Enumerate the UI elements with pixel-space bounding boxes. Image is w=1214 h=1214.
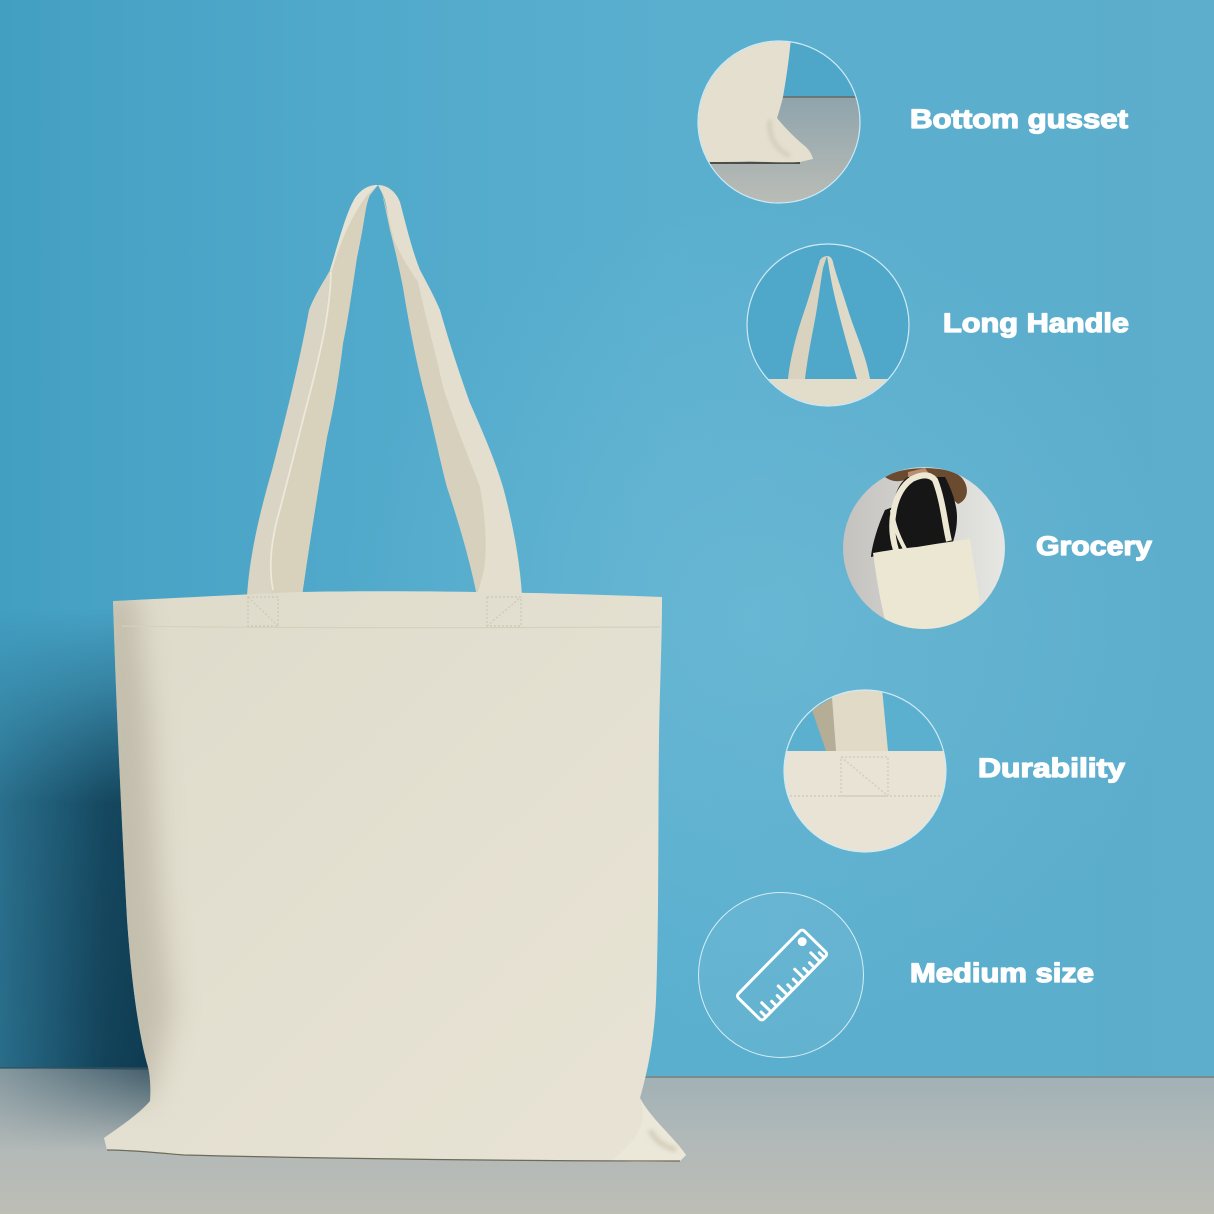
photo circle: person carrying bag xyxy=(842,466,1006,640)
label: Grocery xyxy=(1036,531,1152,561)
bag body xyxy=(104,591,686,1162)
label: Durability xyxy=(978,753,1125,783)
handle: left strap xyxy=(247,185,378,596)
label: Long Handle xyxy=(943,308,1129,338)
handle stitches xyxy=(248,597,521,626)
circle outline xyxy=(747,244,909,406)
photo circle: handles xyxy=(745,243,911,409)
feature: Medium size xyxy=(698,892,1094,1058)
label: Medium size xyxy=(910,958,1094,988)
bag side shading xyxy=(90,590,690,1161)
bag bottom edge xyxy=(107,1150,680,1161)
main tote bag xyxy=(90,185,690,1162)
circle outline xyxy=(698,892,864,1058)
circle outline xyxy=(698,41,860,203)
label: Bottom gusset xyxy=(910,104,1128,134)
feature: Long Handle xyxy=(745,243,1129,409)
feature: Grocery xyxy=(842,466,1152,640)
floor xyxy=(0,1068,1214,1214)
top hem stitching xyxy=(122,626,660,628)
photo circle: stitched handle xyxy=(782,688,948,855)
handle: right strap xyxy=(378,185,522,596)
feature: Durability xyxy=(782,688,1125,855)
photo circle: bag gusset xyxy=(698,42,860,202)
circle outline xyxy=(784,690,946,852)
icon: ruler xyxy=(736,929,828,1021)
feature: Bottom gusset xyxy=(690,38,1128,207)
background wall xyxy=(0,0,981,1070)
